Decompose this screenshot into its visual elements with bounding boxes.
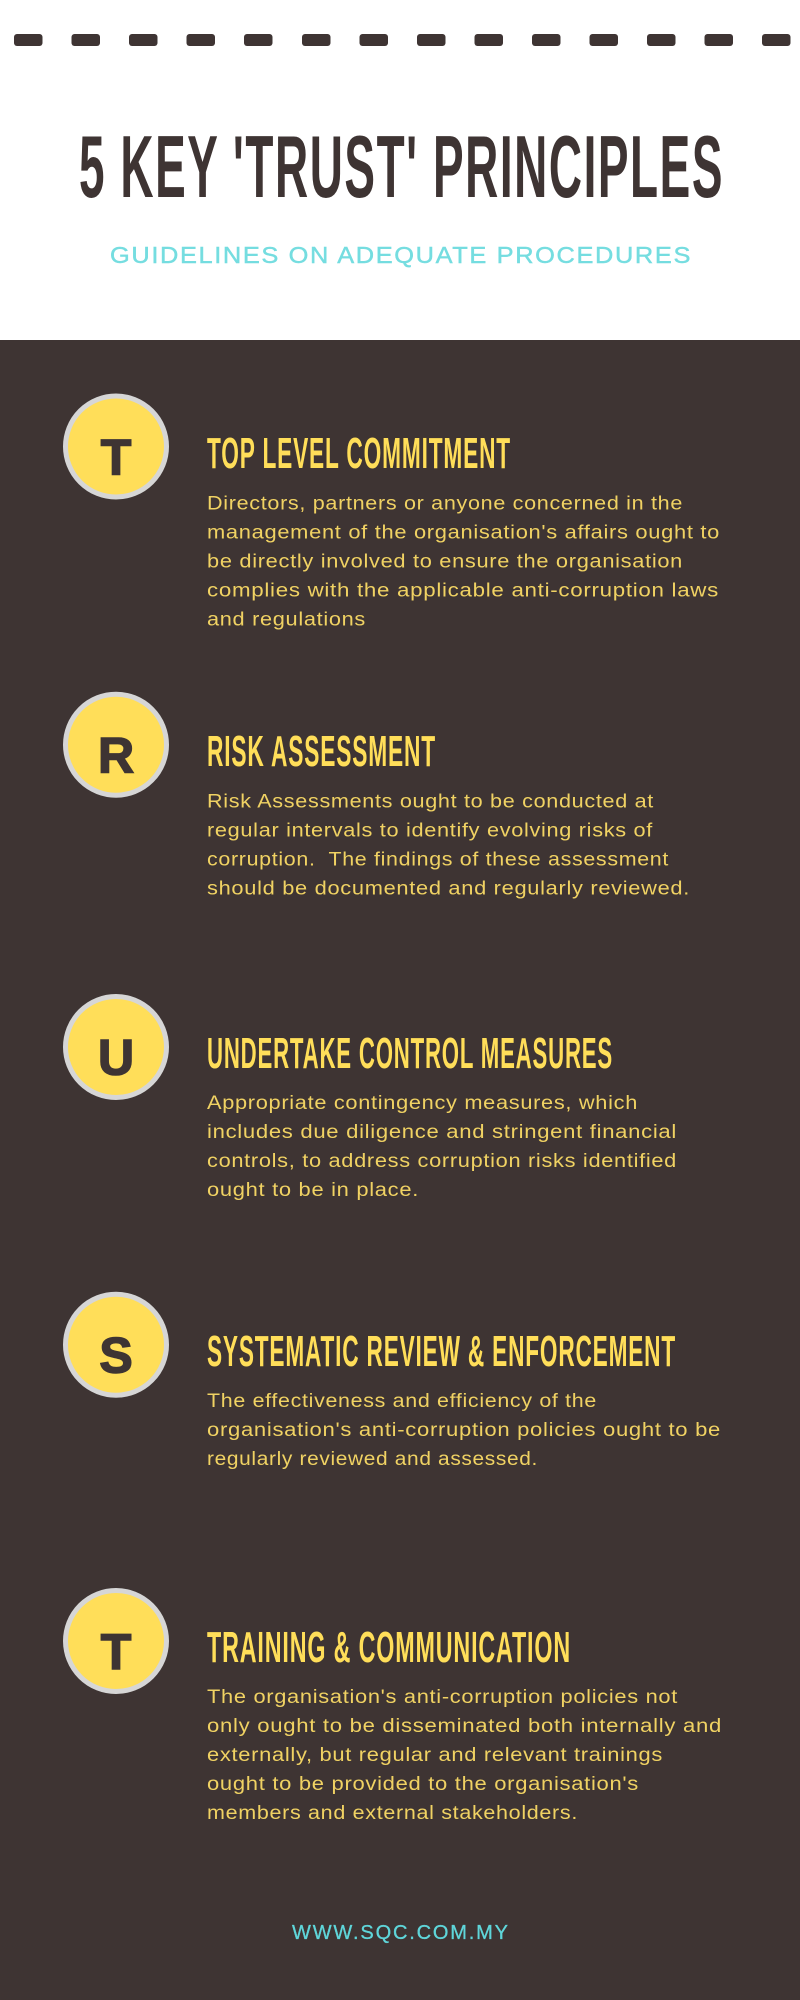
principle 3: undertake control measures: [66, 996, 677, 1201]
body text: regularly reviewed and assessed.: [207, 1449, 538, 1470]
body text: complies with the applicable anti-corruption laws: [207, 580, 719, 602]
icon: letter T badge: [66, 1590, 166, 1692]
body text: The organisation's anti-corruption policies not: [207, 1687, 678, 1708]
body text: members and external stakeholders.: [207, 1803, 578, 1824]
body text: includes due diligence and stringent financial: [207, 1122, 677, 1143]
icon: letter S badge: [66, 1294, 166, 1395]
body text: [207, 1093, 677, 1201]
body text: only ought to be disseminated both internally and: [207, 1716, 722, 1737]
icon: letter R badge: R: [98, 728, 134, 784]
body text: The effectiveness and efficiency of the: [207, 1391, 597, 1412]
principle 2: risk assessment: [66, 694, 690, 900]
icon: letter R badge: [66, 694, 166, 795]
body text: ought to be in place.: [207, 1180, 419, 1201]
heading: TOP LEVEL COMMITMENT: [207, 429, 511, 478]
icon: letter T badge: [66, 396, 166, 497]
body text: regular intervals to identify evolving risks of: [207, 820, 653, 842]
footer website: WWW.SQC.COM.MY: [292, 1922, 508, 1944]
body text: corruption. The findings of these assessment: [207, 850, 669, 870]
body text: management of the organisation's affairs ought to: [207, 522, 720, 544]
body text: Appropriate contingency measures, which: [207, 1093, 638, 1114]
icon: letter U badge: U: [98, 1030, 134, 1086]
body text: should be documented and regularly reviewed.: [207, 878, 690, 900]
icon: letter T badge: T: [101, 430, 131, 486]
body text: [207, 494, 720, 630]
principle 4: systematic review and enforcement: [66, 1294, 721, 1470]
dashed top border: [14, 34, 790, 46]
body text: externally, but regular and relevant trainings: [207, 1745, 663, 1766]
body text: [207, 1687, 722, 1824]
body text: Risk Assessments ought to be conducted at: [207, 792, 654, 812]
body text: be directly involved to ensure the organisation: [207, 552, 683, 572]
body text: [207, 792, 690, 900]
icon: letter T badge: T: [101, 1624, 131, 1680]
body text: controls, to address corruption risks identified: [207, 1151, 677, 1172]
icon: letter S badge: S: [99, 1328, 133, 1384]
principle 1: top level commitment: [66, 396, 720, 630]
icon: letter U badge: [66, 996, 166, 1098]
heading: RISK ASSESSMENT: [207, 727, 436, 776]
body text: ought to be provided to the organisation's: [207, 1774, 639, 1795]
principle 5: training and communication: [66, 1590, 722, 1824]
body text: and regulations: [207, 610, 366, 630]
body text: [207, 1391, 721, 1470]
body text: Directors, partners or anyone concerned in the: [207, 494, 683, 514]
body text: organisation's anti-corruption policies ought to be: [207, 1420, 721, 1441]
subtitle: GUIDELINES ON ADEQUATE PROCEDURES: [110, 242, 692, 268]
